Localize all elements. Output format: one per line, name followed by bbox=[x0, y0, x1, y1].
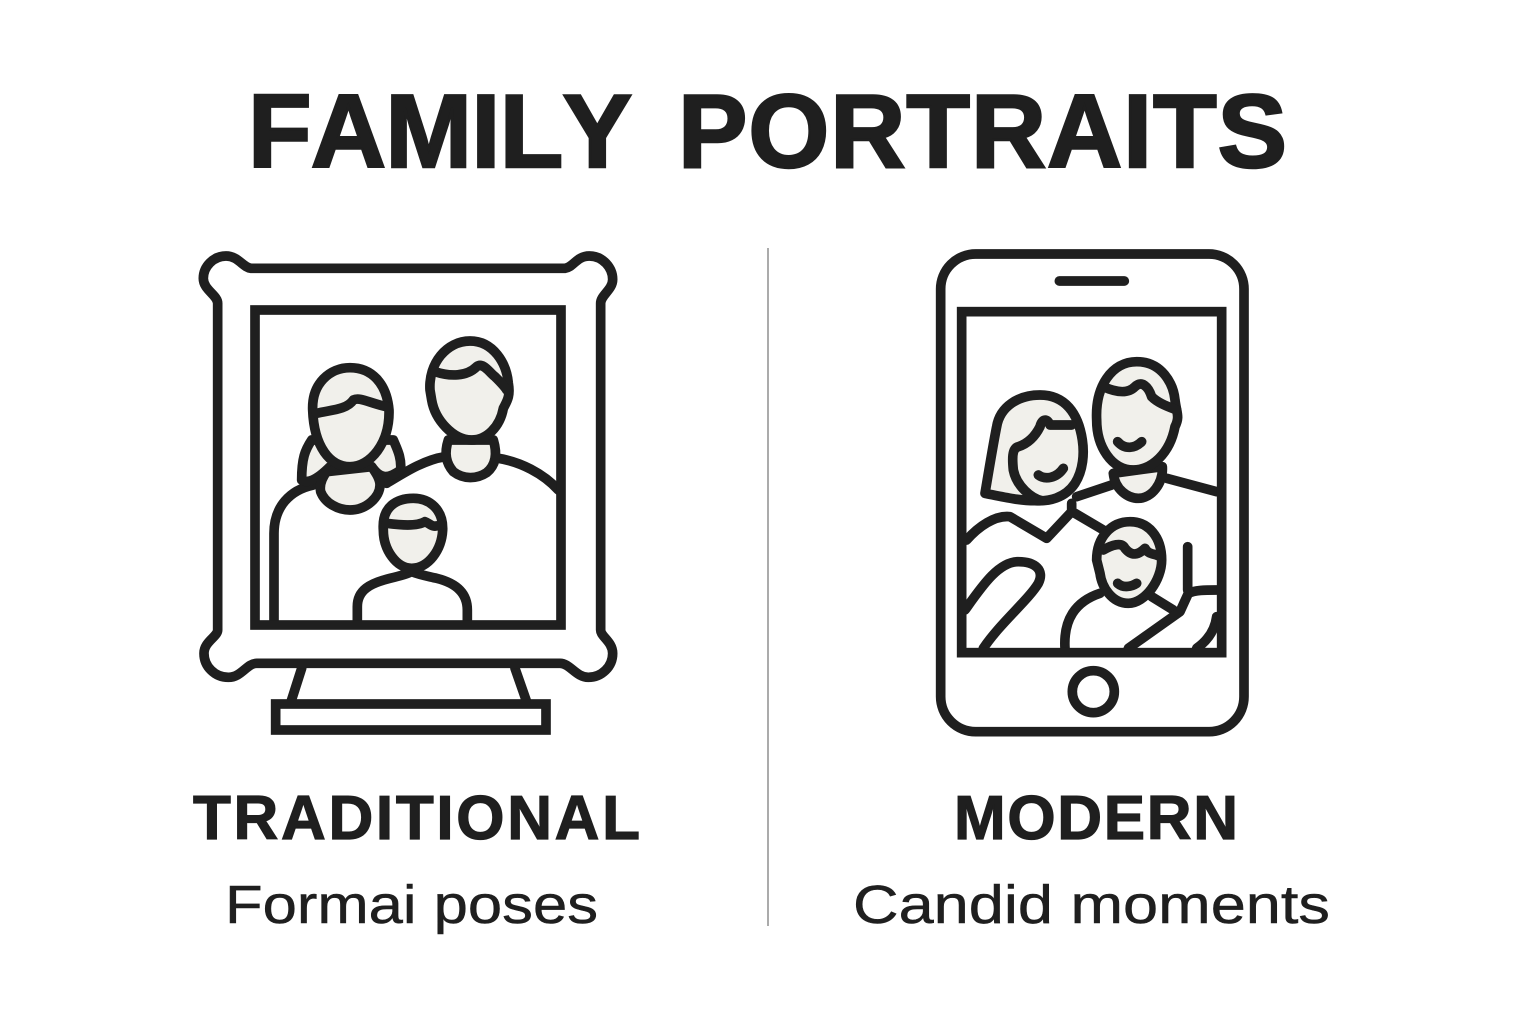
icon: traditional picture frame with family bbox=[203, 256, 613, 730]
center divider bbox=[767, 248, 769, 926]
inner picture opening bbox=[255, 310, 561, 625]
subtext: traditional: Formai poses bbox=[225, 875, 598, 935]
phone body bbox=[941, 254, 1244, 732]
child figure bbox=[1065, 522, 1217, 648]
frame stand bbox=[276, 668, 546, 730]
phone speaker bbox=[1059, 266, 1124, 295]
woman figure bbox=[965, 395, 1103, 648]
screen bbox=[962, 312, 1222, 653]
father figure bbox=[387, 341, 558, 490]
heading: modern: MODERN bbox=[954, 784, 1238, 853]
title: FAMILY bbox=[248, 74, 632, 190]
mother figure bbox=[274, 368, 401, 623]
icon: smartphone with family selfie bbox=[941, 254, 1244, 732]
heading: traditional: TRADITIONAL bbox=[193, 784, 640, 853]
title: PORTRAITS bbox=[678, 74, 1287, 190]
ornate outer frame bbox=[203, 256, 613, 677]
subtext: modern: Candid moments bbox=[853, 875, 1330, 935]
home button bbox=[1072, 671, 1114, 713]
man figure bbox=[1077, 362, 1217, 498]
title bbox=[248, 74, 1287, 190]
child figure bbox=[357, 498, 467, 623]
